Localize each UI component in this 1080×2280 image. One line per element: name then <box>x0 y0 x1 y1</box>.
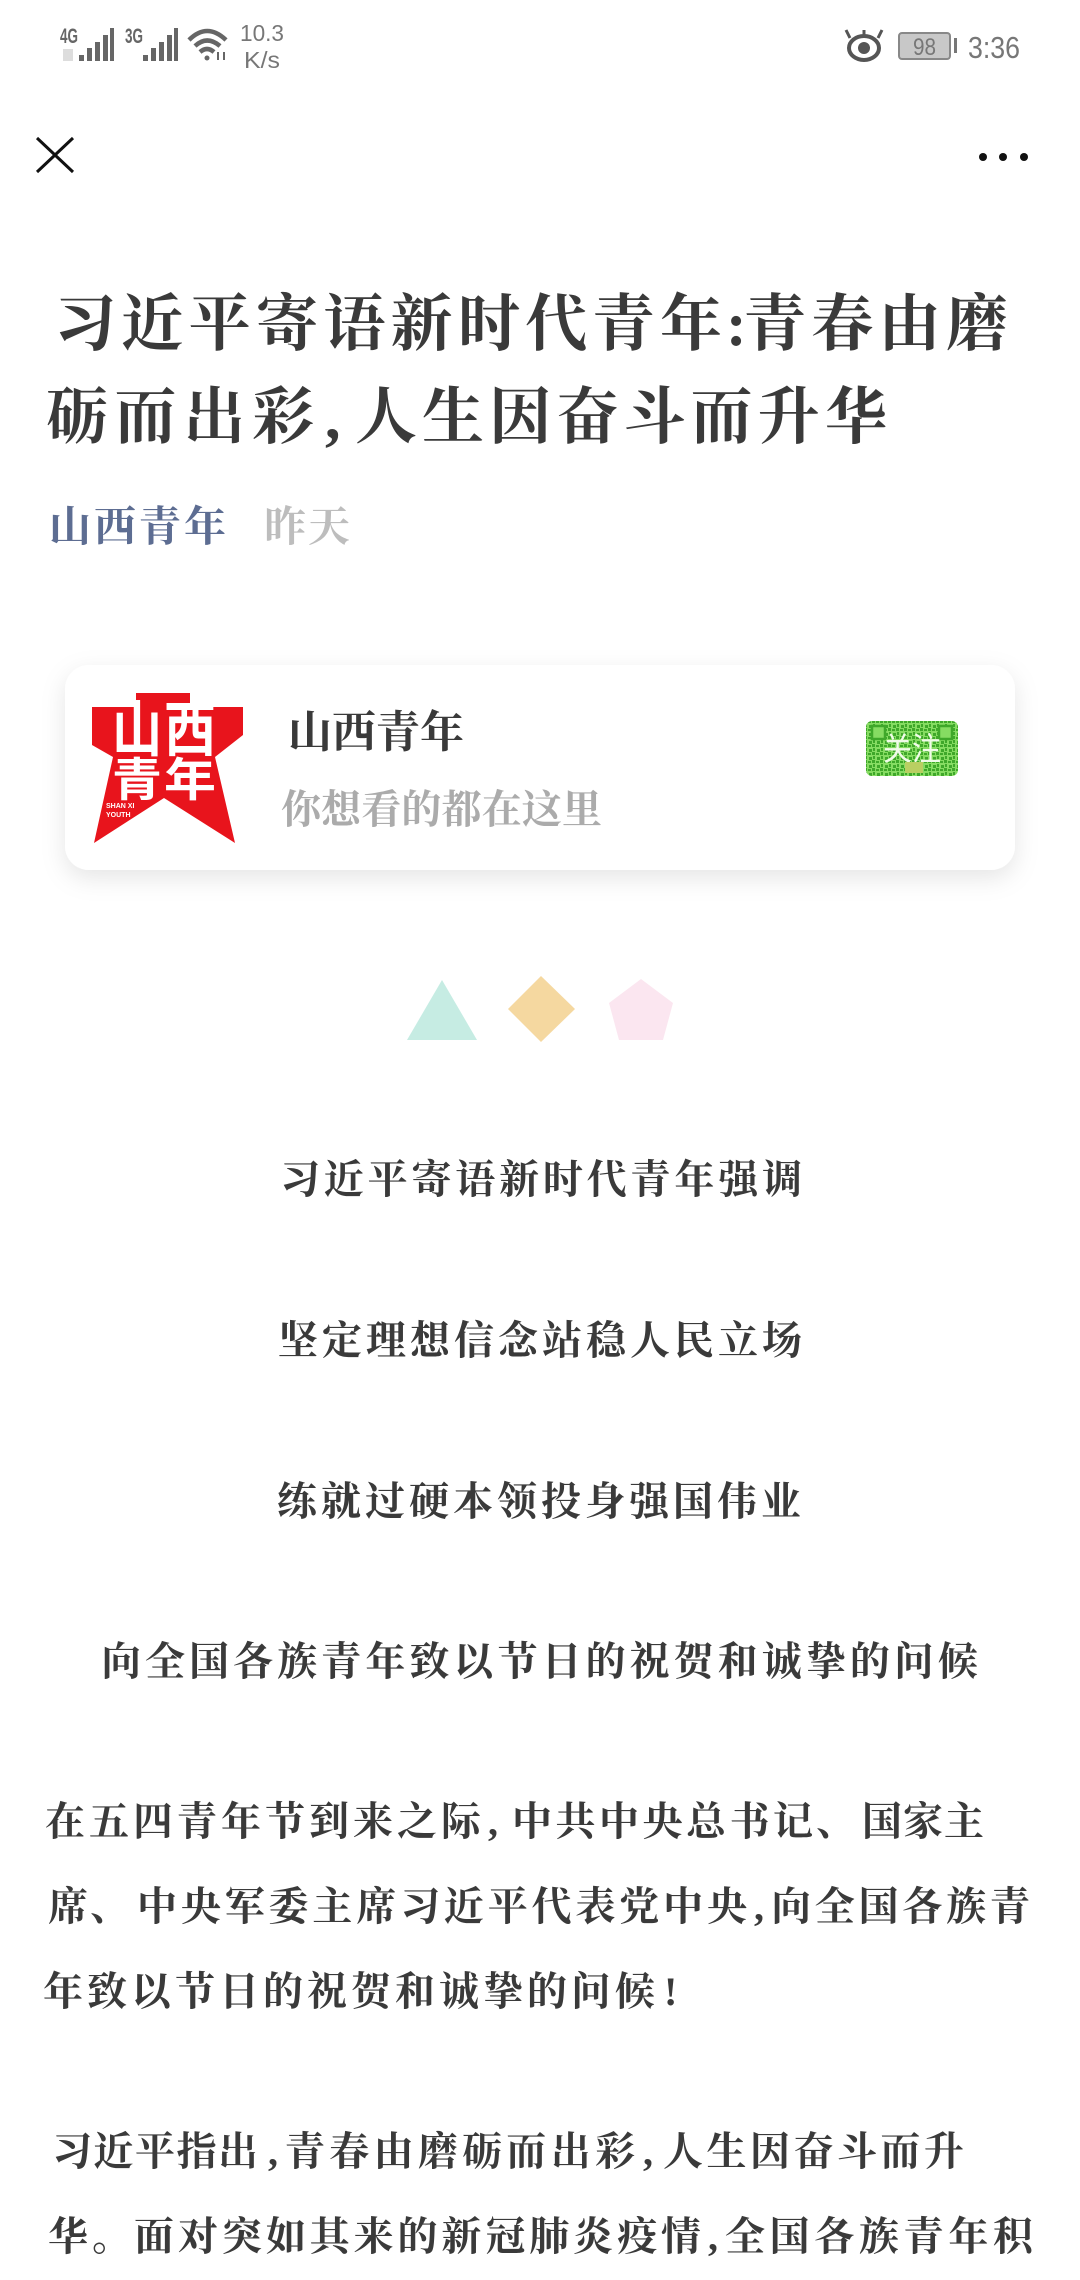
title: 砺而出彩 <box>46 384 314 452</box>
icon: more menu <box>979 153 1028 161</box>
icon: 4G signal <box>60 25 114 61</box>
logo: red star: 山 <box>112 697 162 764</box>
paragraph 2: 人生因奋斗而升 <box>663 2129 964 2174</box>
paragraph 1: 席 <box>48 1884 88 1929</box>
title: , <box>325 384 340 452</box>
paragraph 2: , <box>643 2129 653 2174</box>
paragraph 2: , <box>268 2129 278 2174</box>
title: 习近平寄语新时代青年 <box>54 290 722 359</box>
line 2: 坚定理想信念站稳人民立场 <box>278 1318 802 1363</box>
title: 青春由磨 <box>744 290 1008 359</box>
QR code follow button: 关注 <box>883 731 941 767</box>
decorative shapes row <box>407 976 673 1042</box>
paragraph 2: , <box>708 2214 718 2259</box>
paragraph 1: 国家主 <box>862 1799 984 1844</box>
paragraph 2: 习近平指出 <box>52 2129 258 2174</box>
network speed: K/s <box>244 47 280 73</box>
paragraph 2: 面对突如其来的新冠肺炎疫情 <box>134 2214 701 2259</box>
logo: red star <box>92 693 243 843</box>
paragraph 1: , <box>488 1799 498 1844</box>
icon: diamond <box>508 976 575 1042</box>
paragraph 1: 在五四青年节到来之际 <box>45 1799 484 1844</box>
logo: red star: SHAN XI <box>106 803 134 810</box>
title: 人生因奋斗而升华 <box>355 384 887 452</box>
logo: red star: YOUTH <box>106 812 130 819</box>
paragraph 1: ! <box>664 1969 677 2014</box>
panel: account card <box>65 665 1015 870</box>
account name: 山西青年 <box>49 504 226 551</box>
date: 昨天 <box>264 504 350 551</box>
network speed <box>240 20 284 73</box>
network speed: 10.3 <box>240 20 284 46</box>
icon: triangle <box>407 980 477 1040</box>
paragraph 1: , <box>754 1884 764 1929</box>
logo: red star: 青 <box>112 754 162 806</box>
paragraph 1: 向全国各族青 <box>771 1884 1030 1929</box>
paragraph 2: 。 <box>92 2214 132 2259</box>
icon: 3G signal: 3G <box>125 25 143 48</box>
paragraph 2: 青春由磨砺而出彩 <box>285 2129 635 2174</box>
paragraph 1: 、 <box>90 1884 130 1929</box>
paragraph 1: 、 <box>816 1799 856 1844</box>
icon: wifi <box>189 31 226 60</box>
title: : <box>726 291 747 359</box>
paragraph 2: 全国各族青年积 <box>725 2214 1036 2259</box>
line 3: 练就过硬本领投身强国伟业 <box>277 1479 801 1524</box>
intro lines <box>101 1157 978 1684</box>
line 4: 向全国各族青年致以节日的祝贺和诚挚的问候 <box>101 1639 978 1684</box>
icon: 4G signal: 4G <box>60 25 78 48</box>
QR code follow button <box>866 721 958 776</box>
logo: red star: 年 <box>164 754 216 806</box>
icon: 3G signal <box>125 25 178 61</box>
paragraph 2 <box>48 2129 1036 2259</box>
line 1: 习近平寄语新时代青年强调 <box>280 1157 802 1202</box>
slogan: 你想看的都在这里 <box>281 787 602 832</box>
status bar <box>60 20 1020 73</box>
paragraph 2: 华 <box>48 2214 88 2259</box>
paragraph 1: 中共中央总书记 <box>512 1799 813 1844</box>
clock: 3:36 <box>968 30 1020 65</box>
title <box>46 290 1008 452</box>
icon: close <box>37 138 73 172</box>
paragraph 1 <box>43 1799 1030 2014</box>
icon: battery: 98 <box>913 34 936 61</box>
paragraph 1: 中央军委主席习近平代表党中央 <box>137 1884 747 1929</box>
paragraph 1: 年致以节日的祝贺和诚挚的问候 <box>43 1969 655 2014</box>
icon: battery <box>899 33 957 61</box>
logo: red star: 西 <box>164 697 216 764</box>
byline <box>49 504 350 551</box>
account name: 山西青年 <box>288 708 464 757</box>
icon: pentagon <box>609 979 673 1040</box>
icon: eye <box>846 30 882 60</box>
